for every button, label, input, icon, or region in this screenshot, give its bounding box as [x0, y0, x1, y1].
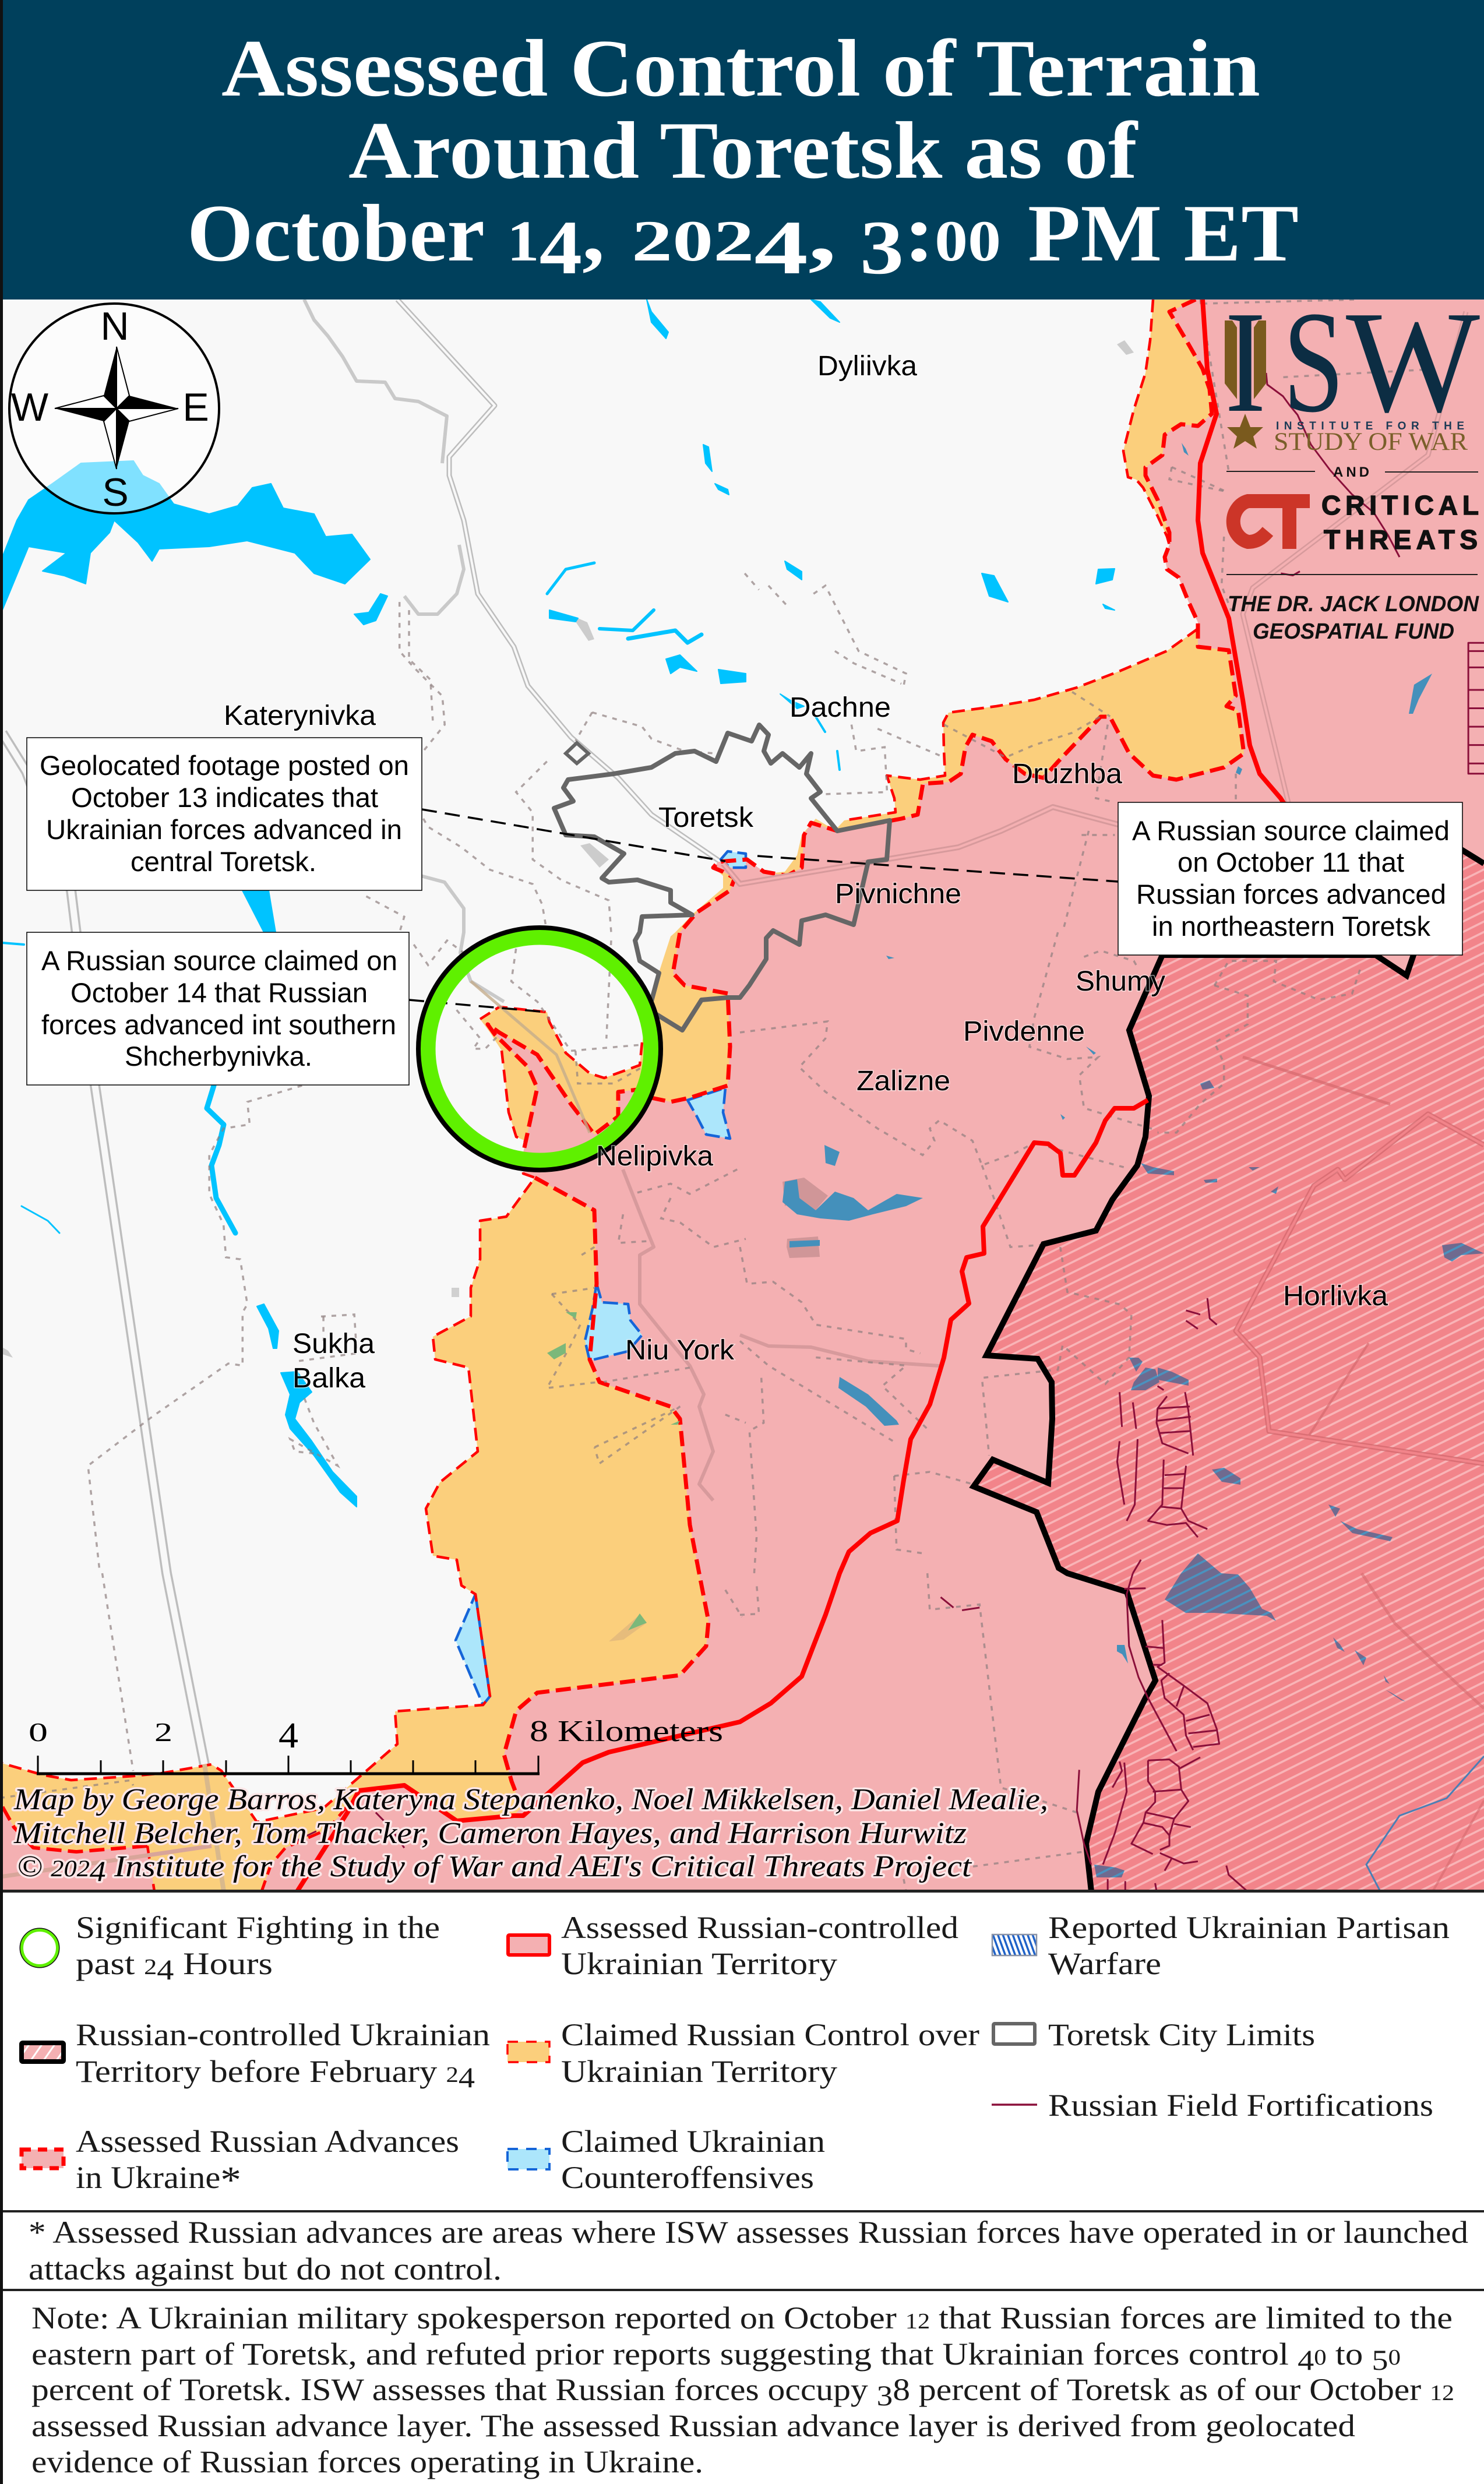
- pre-2022 Russian-controlled territory hatch: [974, 850, 1484, 1891]
- title: 00: [935, 209, 1001, 273]
- legend: pre-February 24 Russian-controlled territory: 4: [459, 2061, 475, 2094]
- title: PM ET: [1028, 188, 1299, 279]
- territory: pink southwest corner: [3, 1811, 153, 1890]
- Russian-controlled territory boundary before February 24: [974, 850, 1484, 1891]
- territory: claimed Russian control (orange): [3, 300, 1244, 1890]
- legend: assessed Russian-controlled territory: Assessed Russian-controlled: [561, 1910, 958, 1945]
- place labels: Niu York: [625, 1335, 735, 1366]
- note panel: evidence of Russian forces operating in Ukraine.: [31, 2444, 703, 2479]
- title: 4: [754, 205, 808, 290]
- legend: Russian field fortifications: Russian Field Fortifications: [1048, 2088, 1433, 2123]
- callout: southern Shcherbynivka: Shcherbynivka.: [125, 1041, 312, 1072]
- legend: claimed Russian control: [507, 2017, 979, 2089]
- legend: pre-February 24 Russian-controlled territory: Territory before February 2: [76, 2054, 457, 2089]
- legend: significant fighting: [21, 1910, 440, 1986]
- CT mark: [1233, 501, 1310, 549]
- callout: northeastern Toretsk: [1118, 802, 1462, 955]
- note panel: 8: [893, 2372, 910, 2407]
- title: :: [904, 188, 935, 279]
- title: Around Toretsk as of: [348, 105, 1138, 196]
- title: 202: [632, 209, 754, 273]
- place labels: Zalizne: [856, 1066, 950, 1097]
- ISW wordmark: [1225, 281, 1480, 443]
- note panel: [0, 2289, 1484, 2479]
- scale bar: [29, 1715, 723, 1774]
- claimed Ukrainian counteroffensives: [456, 851, 746, 1705]
- note panel: to: [1334, 2337, 1359, 2372]
- note panel: eastern part of Toretsk, and refuted prior reports suggesting that Ukrainian forces control: [31, 2337, 1148, 2372]
- Toretsk city limits: [554, 725, 890, 1030]
- map bottom rule: [0, 1890, 1484, 1893]
- ISW wordmark: W: [1346, 281, 1480, 443]
- compass rose: E: [182, 385, 209, 429]
- legend: significant fighting: 4: [157, 1953, 174, 1986]
- note panel: assessed Russian advance layer. The assessed Russian advance layer is derived from geolocated: [31, 2408, 1355, 2443]
- footnote panel: [0, 2210, 1484, 2286]
- callout: central Toretsk: Geolocated footage posted on: [40, 750, 409, 781]
- callout: southern Shcherbynivka: A Russian source claimed on: [41, 945, 397, 976]
- legend: assessed Russian advances: *: [220, 2159, 241, 2201]
- legend: significant fighting: past 2: [76, 1946, 155, 1981]
- significant fighting circle: [418, 928, 661, 1170]
- place labels: Dachne: [789, 692, 891, 723]
- legend: significant fighting: Hours: [174, 1946, 273, 1981]
- place labels: Shumy: [1076, 966, 1165, 997]
- note panel: 5: [1372, 2344, 1388, 2376]
- critical threats wordmark: CRITICAL: [1321, 490, 1479, 520]
- assessed Russian-controlled territory line: [297, 300, 1299, 1891]
- map credits: 4: [90, 1855, 106, 1887]
- legend: reported Ukrainian partisan warfare: Reported Ukrainian Partisan: [1048, 1910, 1450, 1945]
- place labels: Sukha: [292, 1329, 375, 1359]
- place labels: Toretsk: [658, 802, 754, 833]
- legend: claimed Russian control: Claimed Russian Control over: [561, 2017, 979, 2052]
- footnote panel: * Assessed Russian advances are areas where ISW assesses Russian forces have operated in or launched: [29, 2215, 1468, 2250]
- roads across occupied terrain: [0, 312, 1484, 1891]
- scale bar: 8 Kilometers: [530, 1715, 723, 1748]
- callout: southern Shcherbynivka: October 14 that Russian: [71, 977, 368, 1008]
- ISW wordmark: S: [1283, 281, 1344, 443]
- place labels: Horlivka: [1283, 1281, 1388, 1312]
- compass rose: N: [100, 304, 129, 348]
- title: October: [187, 188, 485, 279]
- water in occupied terrain: [547, 443, 1484, 1877]
- water: reservoir and rivers: [2, 300, 1115, 1507]
- scale bar: 0: [29, 1717, 48, 1747]
- dotted local roads: [0, 300, 1437, 1891]
- geospatial fund: THE DR. JACK LONDON: [1228, 592, 1480, 616]
- place labels: Nelipivka: [596, 1141, 713, 1172]
- callout: central Toretsk: [27, 738, 422, 890]
- legend: significant fighting: Significant Fighting in the: [76, 1910, 440, 1945]
- callout: northeastern Toretsk: Russian forces advanced: [1136, 879, 1446, 910]
- callout: central Toretsk: central Toretsk.: [131, 846, 316, 877]
- institute for the: INSTITUTE FOR THE: [1276, 420, 1464, 432]
- note panel: Note: A Ukrainian military spokesperson reported on October 12 that Russian forces are limited to the: [31, 2300, 1453, 2335]
- callout: southern Shcherbynivka: [27, 932, 409, 1085]
- panel: legend: [21, 1910, 1450, 2201]
- note panel: percent of Toretsk as of our October 12: [918, 2372, 1452, 2407]
- place labels: Katerynivka: [224, 700, 376, 731]
- callout: central Toretsk: October 13 indicates that: [71, 782, 378, 813]
- ISW wordmark: I: [1225, 281, 1266, 443]
- logos: ISW and Critical Threats: [1225, 281, 1480, 644]
- callout leader lines: [409, 809, 1118, 1012]
- title: ,: [808, 188, 837, 279]
- legend: assessed Russian-controlled territory: [508, 1910, 958, 1981]
- territory: assessed Russian-controlled and advances (pink): [262, 300, 1484, 1891]
- title: 1: [507, 209, 540, 273]
- scale bar: 4: [279, 1716, 298, 1756]
- title: ,: [582, 188, 605, 279]
- legend: claimed Ukrainian counteroffensives: Claimed Ukrainian: [561, 2124, 825, 2159]
- place labels: [224, 351, 1388, 1394]
- study of war: STUDY OF WAR: [1274, 428, 1468, 456]
- place labels: Balka: [292, 1363, 365, 1394]
- title: 4: [540, 205, 582, 290]
- map credits: Mitchell Belcher, Tom Thacker, Cameron Hayes, and Harrison Hurwitz: [13, 1817, 967, 1850]
- map credits: [13, 1783, 1048, 1887]
- ISW brown I accents: [1225, 320, 1266, 399]
- legend: pre-February 24 Russian-controlled territory: Russian-controlled Ukrainian: [76, 2017, 490, 2052]
- legend: claimed Russian control: Ukrainian Territory: [561, 2054, 837, 2089]
- legend: reported Ukrainian partisan warfare: [992, 1910, 1450, 1981]
- panel: map: [0, 281, 1484, 1891]
- place labels: Pivnichne: [835, 879, 961, 910]
- title: Assessed Control of Terrain: [221, 23, 1260, 114]
- map credits: Institute for the Study of War and AEI's Critical Threats Project: [106, 1850, 972, 1883]
- compass rose: S: [102, 470, 129, 515]
- callout: northeastern Toretsk: on October 11 that: [1178, 847, 1404, 878]
- note panel: 0: [1314, 2345, 1327, 2370]
- footnote panel: attacks against but do not control.: [29, 2252, 502, 2286]
- callout: central Toretsk: Ukrainian forces advanced in: [46, 814, 402, 845]
- callout: northeastern Toretsk: in northeastern Toretsk: [1152, 911, 1430, 942]
- map credits: © 202: [17, 1850, 86, 1883]
- header panel: [0, 0, 1484, 300]
- Russian field fortifications: [290, 373, 1484, 1891]
- map credits: Map by George Barros, Kateryna Stepanenko, Noel Mikkelsen, Daniel Mealie,: [13, 1783, 1048, 1816]
- note panel: 4: [1298, 2344, 1314, 2376]
- logos: ISW and Critical Threats: THREATS: [1324, 524, 1478, 555]
- place labels: Pivdenne: [963, 1016, 1085, 1047]
- legend: claimed Ukrainian counteroffensives: Counteroffensives: [561, 2160, 814, 2195]
- compass rose: [9, 304, 219, 515]
- legend: reported Ukrainian partisan warfare: Warfare: [1048, 1946, 1161, 1981]
- note panel: percent of Toretsk. ISW assesses that Russian forces occupy: [31, 2372, 789, 2407]
- legend: Toretsk city limits: Toretsk City Limits: [1048, 2017, 1315, 2052]
- place labels: Druzhba: [1012, 759, 1122, 790]
- callout: southern Shcherbynivka: forces advanced int southern: [41, 1009, 396, 1040]
- note panel: 3: [877, 2379, 893, 2412]
- callout: northeastern Toretsk: A Russian source claimed: [1132, 815, 1450, 846]
- title: 3: [860, 205, 904, 290]
- roads and rail in unoccupied terrain: [0, 300, 1134, 1891]
- scale bar: 2: [154, 1717, 172, 1747]
- legend: assessed Russian advances: in Ukraine: [76, 2160, 209, 2195]
- place labels: Dyliivka: [817, 351, 917, 382]
- city limits outlying diamond: [566, 743, 588, 763]
- legend: assessed Russian advances: [22, 2124, 459, 2201]
- compass rose: W: [11, 385, 48, 429]
- legend: assessed Russian advances: Assessed Russian Advances: [76, 2124, 459, 2159]
- title: [187, 23, 1299, 290]
- legend: pre-February 24 Russian-controlled territory: [22, 2017, 490, 2094]
- logos: ISW and Critical Threats: GEOSPATIAL FUND: [1253, 619, 1454, 644]
- note panel: 0: [1388, 2345, 1401, 2370]
- legend: assessed Russian-controlled territory: Ukrainian Territory: [561, 1946, 837, 1981]
- and divider: AND: [1333, 464, 1369, 480]
- ISW star: [1227, 414, 1263, 449]
- assessed and claimed advance boundary dashes: [0, 300, 1244, 1891]
- legend: claimed Ukrainian counteroffensives: [507, 2124, 825, 2195]
